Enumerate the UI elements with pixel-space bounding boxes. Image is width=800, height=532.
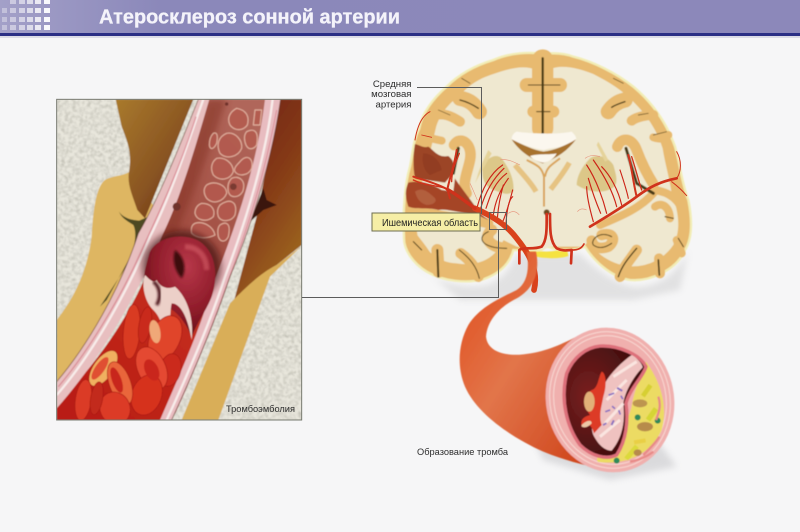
gyri folds bbox=[413, 60, 685, 277]
right dark wall edge bbox=[172, 99, 281, 420]
label: middle cerebral artery: артерия bbox=[376, 100, 412, 110]
brain outline bbox=[404, 53, 691, 281]
stone background bbox=[57, 99, 302, 420]
brain shadow bbox=[410, 250, 688, 300]
label: middle cerebral artery: мозговая bbox=[371, 89, 412, 100]
dark notch right bbox=[250, 188, 277, 222]
dark spots bbox=[230, 183, 237, 190]
callout: ischemic area bbox=[372, 213, 480, 231]
yellow base bbox=[523, 247, 568, 258]
dark notch left bbox=[100, 212, 148, 307]
left wall bbox=[57, 99, 209, 408]
panel border bbox=[57, 99, 302, 420]
yellow tissue right bbox=[182, 246, 302, 420]
caption: thromboembolism: Тромбоэмболия bbox=[226, 404, 295, 415]
label: middle cerebral artery: Средняя bbox=[373, 79, 412, 90]
thrombus white streaks bbox=[143, 275, 192, 340]
yellow tissue left bbox=[57, 170, 160, 383]
white matter right bbox=[548, 67, 678, 266]
red blood cells bbox=[75, 304, 182, 420]
brown tissue left bbox=[116, 99, 193, 218]
icon: header pixel grid bbox=[2, 0, 50, 30]
artery shadow bbox=[497, 340, 677, 480]
infarct ischemic area bbox=[406, 144, 488, 220]
panel: thromboembolism illustration bbox=[57, 99, 302, 430]
callout: ischemic area: Ишемическая область bbox=[382, 217, 478, 229]
cerebral arteries bbox=[413, 112, 687, 290]
thrombus red bbox=[581, 372, 606, 433]
caption: thrombus formation: Образование тромба bbox=[417, 447, 509, 458]
ring outer wall bbox=[532, 316, 688, 484]
right wall bbox=[160, 99, 281, 420]
title: Атеросклероз сонной артерии bbox=[99, 6, 400, 28]
ventricles bbox=[512, 132, 576, 215]
callout: leader lines bbox=[302, 88, 506, 298]
vessel lumen bbox=[57, 99, 267, 420]
header band bbox=[0, 0, 800, 38]
lumen bbox=[564, 346, 646, 457]
label: middle cerebral artery bbox=[371, 79, 412, 110]
brain cross-section bbox=[404, 53, 691, 300]
fine arterial branches bbox=[470, 156, 600, 215]
perforating arteries bbox=[477, 160, 628, 223]
brown tissue right bbox=[233, 99, 302, 303]
sulci bbox=[413, 58, 683, 278]
clot shadow bbox=[142, 231, 221, 303]
fibrous cap bbox=[592, 355, 643, 451]
endothelial cells bbox=[191, 108, 262, 241]
basal ganglia bbox=[475, 142, 616, 194]
plaque bbox=[597, 362, 664, 463]
white matter centre bbox=[503, 133, 593, 249]
artery with thrombus bbox=[460, 252, 688, 484]
crystals bbox=[603, 387, 624, 426]
artery body bbox=[460, 252, 600, 468]
thrombus bbox=[144, 237, 215, 337]
white matter left bbox=[417, 67, 539, 264]
